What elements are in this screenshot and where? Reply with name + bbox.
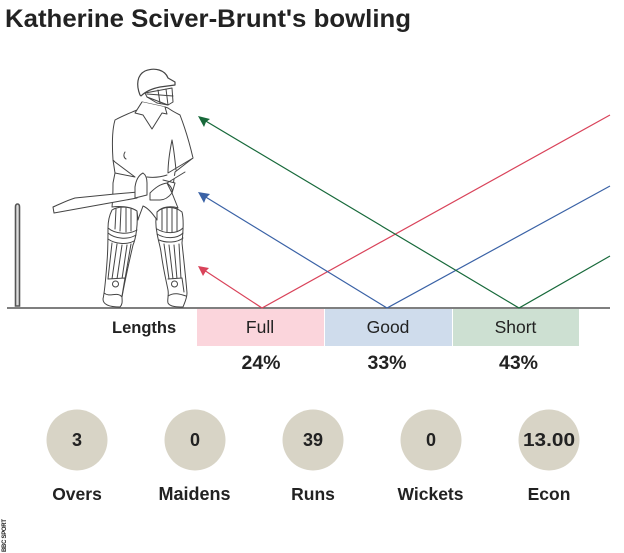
stat: runs: 39 <box>303 430 323 450</box>
stat: maidens: 0 <box>190 430 200 450</box>
percentage: full: 24% <box>241 352 281 374</box>
percentage: good: 33% <box>367 352 407 374</box>
stat: econ: 13.00 <box>523 430 575 450</box>
title: Katherine Sciver-Brunt's bowling <box>5 5 411 33</box>
length bar: good: Good <box>367 317 409 337</box>
icon: left leg pad <box>103 207 137 307</box>
stat: wickets: 0 <box>426 430 436 450</box>
stat: runs: Runs <box>291 484 335 504</box>
stat: wickets: Wickets <box>398 484 464 504</box>
stat: overs: Overs <box>52 484 102 504</box>
length bar: full <box>197 309 324 346</box>
stat: overs: 3 <box>72 430 82 450</box>
length bar: good <box>325 309 452 346</box>
arrow: short length ball path <box>198 116 610 308</box>
label: lengths: Lengths <box>112 319 176 337</box>
length bar: full: Full <box>246 317 274 337</box>
length bar: short <box>453 309 579 346</box>
stat: maidens <box>158 410 231 504</box>
icon: torso and shirt <box>112 102 193 220</box>
stat: overs <box>46 410 108 504</box>
arrow: good length ball path <box>198 186 610 308</box>
icon: helmet and face guard <box>138 69 175 105</box>
stat: maidens: Maidens <box>158 484 231 504</box>
ground line <box>7 307 610 309</box>
length bar: short: Short <box>495 317 537 337</box>
stat: econ: Econ <box>528 484 570 504</box>
icon: stump <box>16 204 20 306</box>
icon: bat <box>53 192 138 213</box>
credit: BBC Sport: BBC SPORT <box>2 519 8 552</box>
icon: right leg pad <box>156 207 187 307</box>
icon: hands <box>135 173 147 198</box>
illustration: batter at the crease <box>53 69 193 307</box>
arrow: full length ball path <box>198 115 610 308</box>
stat: runs <box>282 410 344 504</box>
icon: lower hand and wrist guard <box>150 172 185 200</box>
percentage: short: 43% <box>499 352 538 374</box>
stat: econ <box>518 410 580 504</box>
stat: wickets <box>398 410 464 504</box>
